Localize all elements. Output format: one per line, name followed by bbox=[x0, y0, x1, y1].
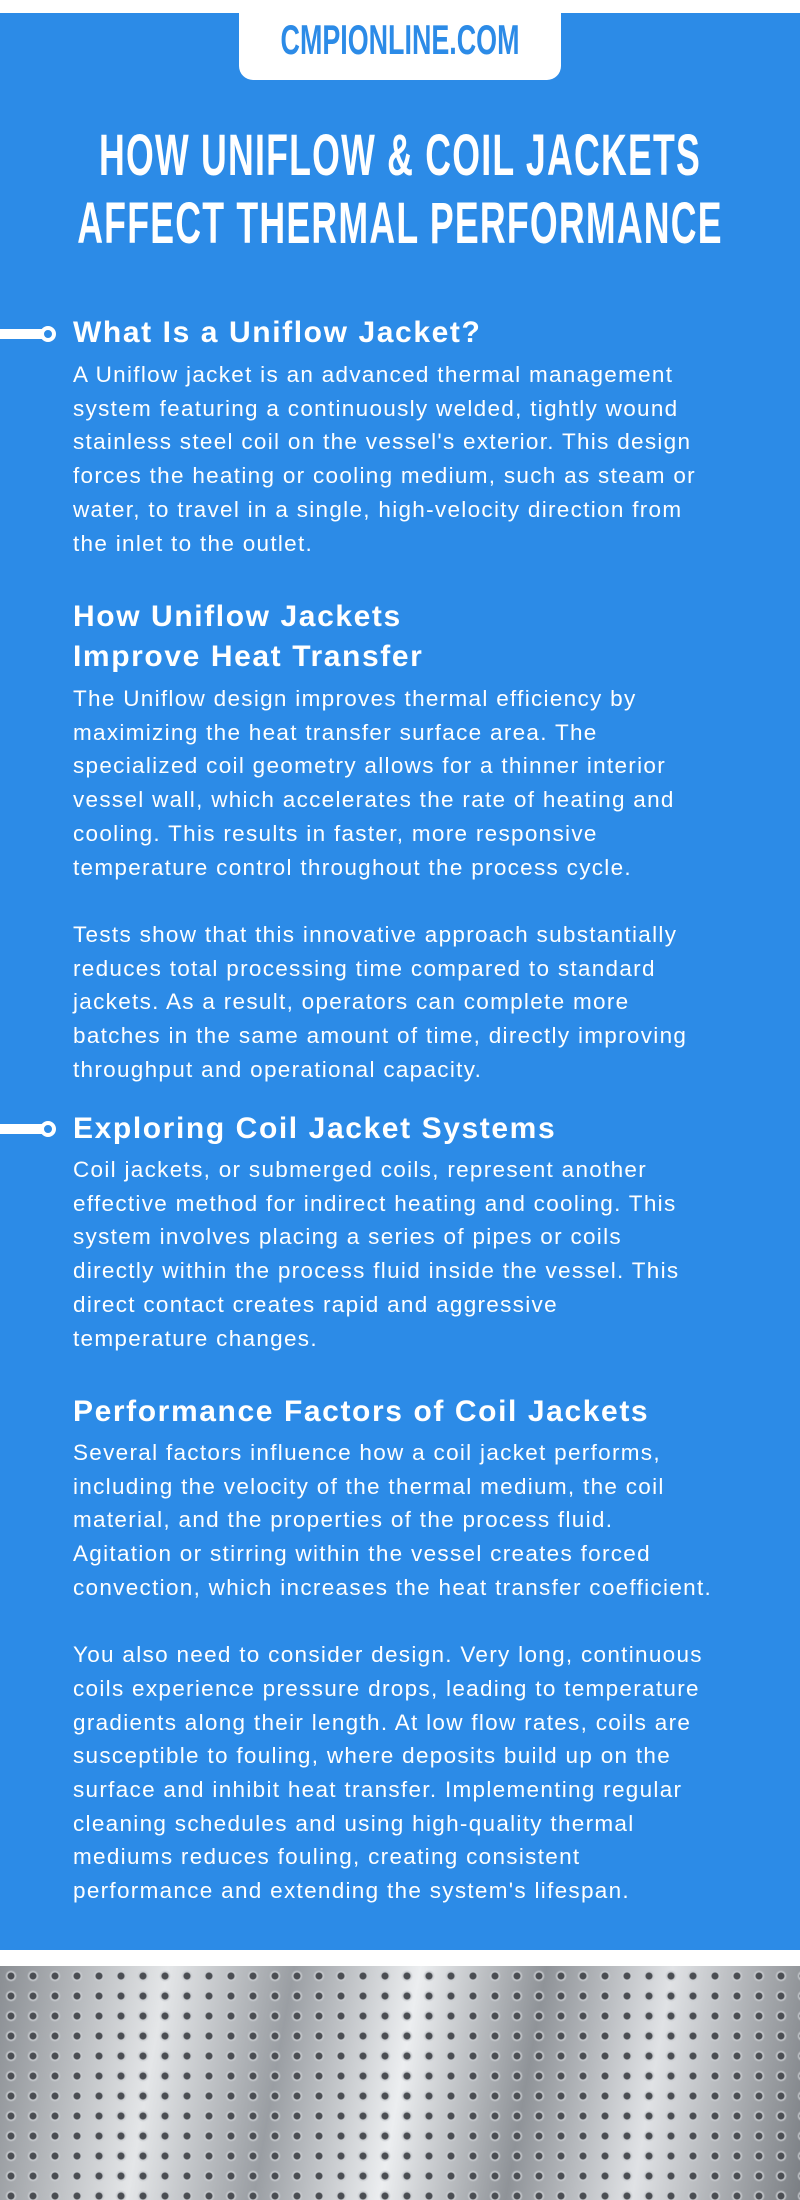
photo: dimpled jacket panels bbox=[0, 1966, 800, 2200]
text: performance factors: mediums reduces fouling, creating consistent bbox=[73, 1844, 580, 1869]
text: heat transfer: batches in the same amount of time, directly improving bbox=[73, 1023, 687, 1048]
text: heat transfer: temperature control throughout the process cycle. bbox=[73, 855, 632, 880]
text: performance factors: performance and extending the system's lifespan. bbox=[73, 1878, 630, 1903]
site tab: CMPIONLINE.COM bbox=[281, 16, 519, 63]
text: heat transfer: The Uniflow design improves thermal efficiency by bbox=[73, 686, 637, 711]
title: HOW UNIFLOW & COIL JACKETS bbox=[99, 123, 701, 188]
text: heat transfer: Tests show that this innovative approach substantially bbox=[73, 922, 677, 947]
heading: coil jackets: Exploring Coil Jacket Systems bbox=[73, 1112, 556, 1145]
heading: how uniflow improves: Improve Heat Transfer bbox=[73, 640, 423, 673]
text: coil jackets bbox=[73, 1157, 679, 1351]
text: heat transfer: maximizing the heat transfer surface area. The bbox=[73, 720, 598, 745]
text: heat transfer: jackets. As a result, operators can complete more bbox=[73, 989, 629, 1014]
text: performance factors bbox=[73, 1440, 712, 1903]
text: coil jackets: directly within the process fluid inside the vessel. This bbox=[73, 1258, 679, 1283]
text: heat transfer: reduces total processing time compared to standard bbox=[73, 956, 656, 981]
title bbox=[77, 123, 723, 256]
marker: section 1 bbox=[0, 326, 56, 342]
text: performance factors: surface and inhibit heat transfer. Implementing regular bbox=[73, 1777, 682, 1802]
heading: performance factors: Performance Factors of Coil Jackets bbox=[73, 1395, 649, 1428]
text: heat transfer: throughput and operational capacity. bbox=[73, 1057, 482, 1082]
text: uniflow definition bbox=[73, 362, 696, 556]
heading: how uniflow improves: How Uniflow Jackets bbox=[73, 600, 402, 633]
text: performance factors: convection, which increases the heat transfer coefficient. bbox=[73, 1575, 712, 1600]
text: performance factors: You also need to consider design. Very long, continuous bbox=[73, 1642, 703, 1667]
text: uniflow definition: system featuring a continuously welded, tightly wound bbox=[73, 396, 678, 421]
site tab bbox=[239, 0, 561, 80]
text: heat transfer: vessel wall, which accelerates the rate of heating and bbox=[73, 787, 675, 812]
text: uniflow definition: A Uniflow jacket is an advanced thermal management bbox=[73, 362, 673, 387]
heading: what is uniflow: What Is a Uniflow Jacket? bbox=[73, 316, 481, 349]
text: uniflow definition: stainless steel coil on the vessel's exterior. This design bbox=[73, 429, 691, 454]
text: heat transfer bbox=[72, 686, 687, 1082]
text: coil jackets: Coil jackets, or submerged coils, represent another bbox=[73, 1157, 647, 1182]
text: heat transfer: specialized coil geometry allows for a thinner interior bbox=[73, 753, 666, 778]
text: performance factors: including the velocity of the thermal medium, the coil bbox=[73, 1474, 665, 1499]
text: coil jackets: effective method for indirect heating and cooling. This bbox=[73, 1191, 676, 1216]
text: coil jackets: system involves placing a series of pipes or coils bbox=[73, 1224, 622, 1249]
text: performance factors: susceptible to fouling, where deposits build up on the bbox=[73, 1743, 671, 1768]
text: performance factors: material, and the properties of the process fluid. bbox=[73, 1507, 613, 1532]
text: uniflow definition: water, to travel in a single, high-velocity direction from bbox=[73, 497, 682, 522]
text: performance factors: Several factors influence how a coil jacket performs, bbox=[73, 1440, 661, 1465]
title: AFFECT THERMAL PERFORMANCE bbox=[77, 191, 723, 256]
text: performance factors: Agitation or stirring within the vessel creates forced bbox=[73, 1541, 651, 1566]
text: heat transfer: cooling. This results in faster, more responsive bbox=[73, 821, 598, 846]
marker: section 3 bbox=[0, 1121, 56, 1137]
text: coil jackets: temperature changes. bbox=[73, 1326, 318, 1351]
text: performance factors: cleaning schedules and using high-quality thermal bbox=[73, 1811, 635, 1836]
text: uniflow definition: forces the heating or cooling medium, such as steam or bbox=[73, 463, 696, 488]
heading: how uniflow improves bbox=[73, 600, 423, 673]
text: uniflow definition: the inlet to the outlet. bbox=[73, 531, 313, 556]
text: coil jackets: direct contact creates rapid and aggressive bbox=[73, 1292, 558, 1317]
text: performance factors: gradients along their length. At low flow rates, coils are bbox=[73, 1710, 691, 1735]
text: performance factors: coils experience pressure drops, leading to temperature bbox=[73, 1676, 700, 1701]
